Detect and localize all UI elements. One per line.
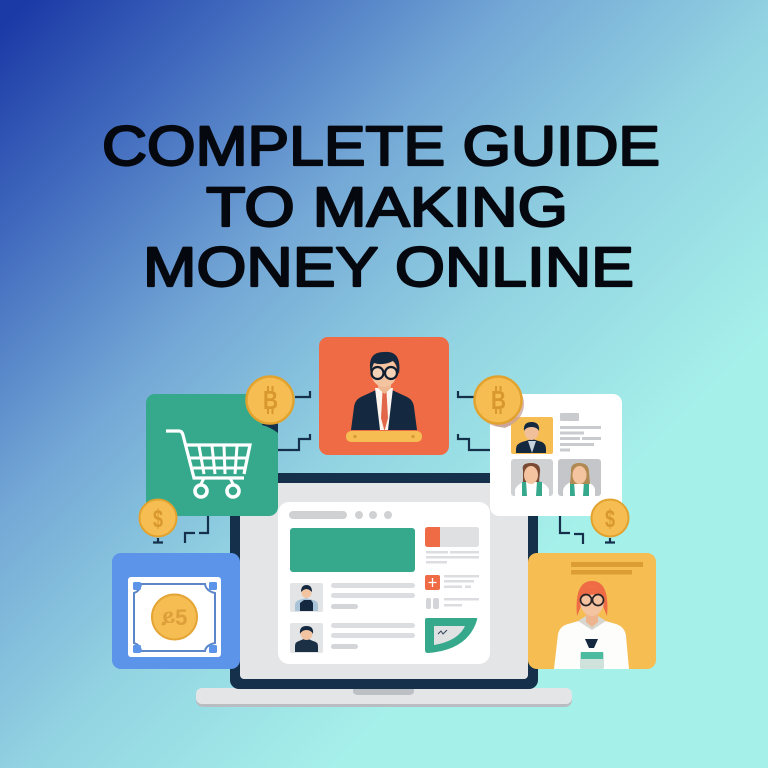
- web page panel: [278, 502, 490, 664]
- heading bars: [571, 562, 643, 567]
- green card: shopping cart: [146, 394, 278, 516]
- connector lines: [153, 391, 615, 544]
- top profile: [511, 417, 553, 454]
- title: COMPLETE GUIDE: [102, 114, 660, 177]
- green banner: [290, 528, 415, 572]
- coin: bitcoin left: [246, 376, 294, 424]
- coin: bitcoin right: [474, 376, 524, 427]
- icon: shopping cart: [166, 431, 250, 497]
- icon: banknote: ይ5: [161, 605, 187, 630]
- coin: bitcoin left: B: [263, 385, 278, 415]
- laptop screen: [240, 483, 528, 679]
- bottom left profile: [511, 459, 553, 496]
- sidebar widget: orange tag: [425, 527, 479, 564]
- title: TO MAKING: [206, 175, 568, 238]
- laptop base: [196, 688, 572, 707]
- podium: [346, 431, 422, 442]
- yellow card: woman with phone: [528, 553, 656, 669]
- phone: [580, 652, 604, 669]
- bottom right profile: [558, 459, 601, 496]
- blue card: banknote: [112, 553, 240, 669]
- orange card: presenter: [319, 337, 449, 455]
- sidebar widget: small symbol: [426, 598, 479, 609]
- coin: bitcoin right: B: [491, 385, 506, 415]
- coin: dollar left: [140, 500, 176, 536]
- coin: dollar left: $: [153, 505, 163, 533]
- sidebar widget: green chart: [425, 618, 477, 653]
- title: [102, 114, 660, 298]
- presenter figure: [351, 352, 417, 431]
- woman figure: [554, 581, 629, 669]
- profile row 2: [290, 623, 415, 653]
- sidebar widget: plus icon: [425, 575, 479, 590]
- laptop frame: [230, 473, 538, 689]
- laptop: [196, 473, 572, 707]
- text lines: [560, 413, 601, 452]
- address bar: [289, 511, 392, 519]
- coin: dollar right: $: [605, 505, 615, 533]
- profile row 1: [290, 583, 415, 612]
- title: MONEY ONLINE: [143, 235, 634, 298]
- white card: team profiles: [490, 394, 622, 516]
- coin: dollar right: [592, 500, 628, 536]
